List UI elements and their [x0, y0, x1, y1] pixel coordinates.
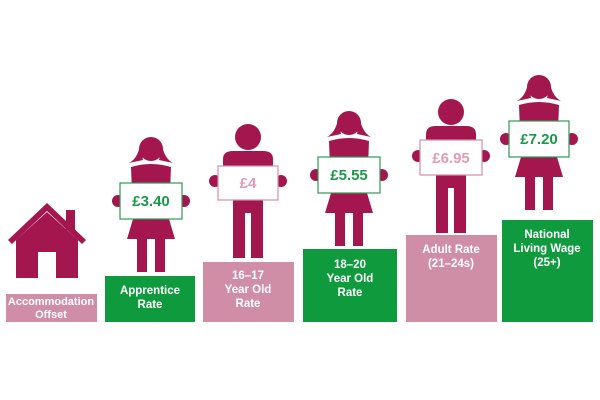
- figure: adult: [412, 99, 490, 233]
- figure: 16-17: £4: [240, 175, 257, 192]
- box: 16-17 rate: 16–17: [232, 270, 264, 282]
- box: accommodation offset: [6, 294, 97, 322]
- figure: 18-20: [310, 111, 388, 246]
- box: apprentice rate: Rate: [138, 299, 162, 311]
- box: 18-20 rate: 18–20: [334, 259, 366, 271]
- box: national living wage: National: [524, 229, 570, 241]
- box: national living wage: (25+): [533, 257, 561, 269]
- figure: apprentice: £3.40: [132, 193, 170, 210]
- box: adult rate: Adult Rate: [422, 244, 480, 256]
- box: adult rate: [406, 235, 497, 322]
- box: 16-17 rate: Year Old: [225, 284, 271, 296]
- box: accommodation offset: Offset: [35, 309, 67, 321]
- box: national living wage: Living Wage: [513, 243, 581, 255]
- box: adult rate: (21–24s): [428, 258, 474, 270]
- box: national living wage: [502, 220, 593, 322]
- box: 16-17 rate: [203, 262, 294, 322]
- box: 18-20 rate: Rate: [338, 287, 362, 299]
- figure: apprentice: [112, 137, 190, 272]
- figure: 18-20: £5.55: [330, 167, 368, 184]
- figure: adult: £6.95: [432, 150, 470, 167]
- box: 18-20 rate: Year Old: [327, 273, 373, 285]
- box: accommodation offset: Accommodation: [8, 296, 94, 308]
- box: 18-20 rate: [303, 249, 397, 322]
- figure: 16-17: [209, 124, 287, 258]
- box: 16-17 rate: Rate: [236, 298, 260, 310]
- box: apprentice rate: [105, 276, 195, 322]
- figure: national living wage: £7.20: [520, 131, 558, 148]
- box: apprentice rate: Apprentice: [120, 285, 180, 297]
- icon: house: [8, 203, 86, 278]
- figure: national living wage: [500, 75, 578, 210]
